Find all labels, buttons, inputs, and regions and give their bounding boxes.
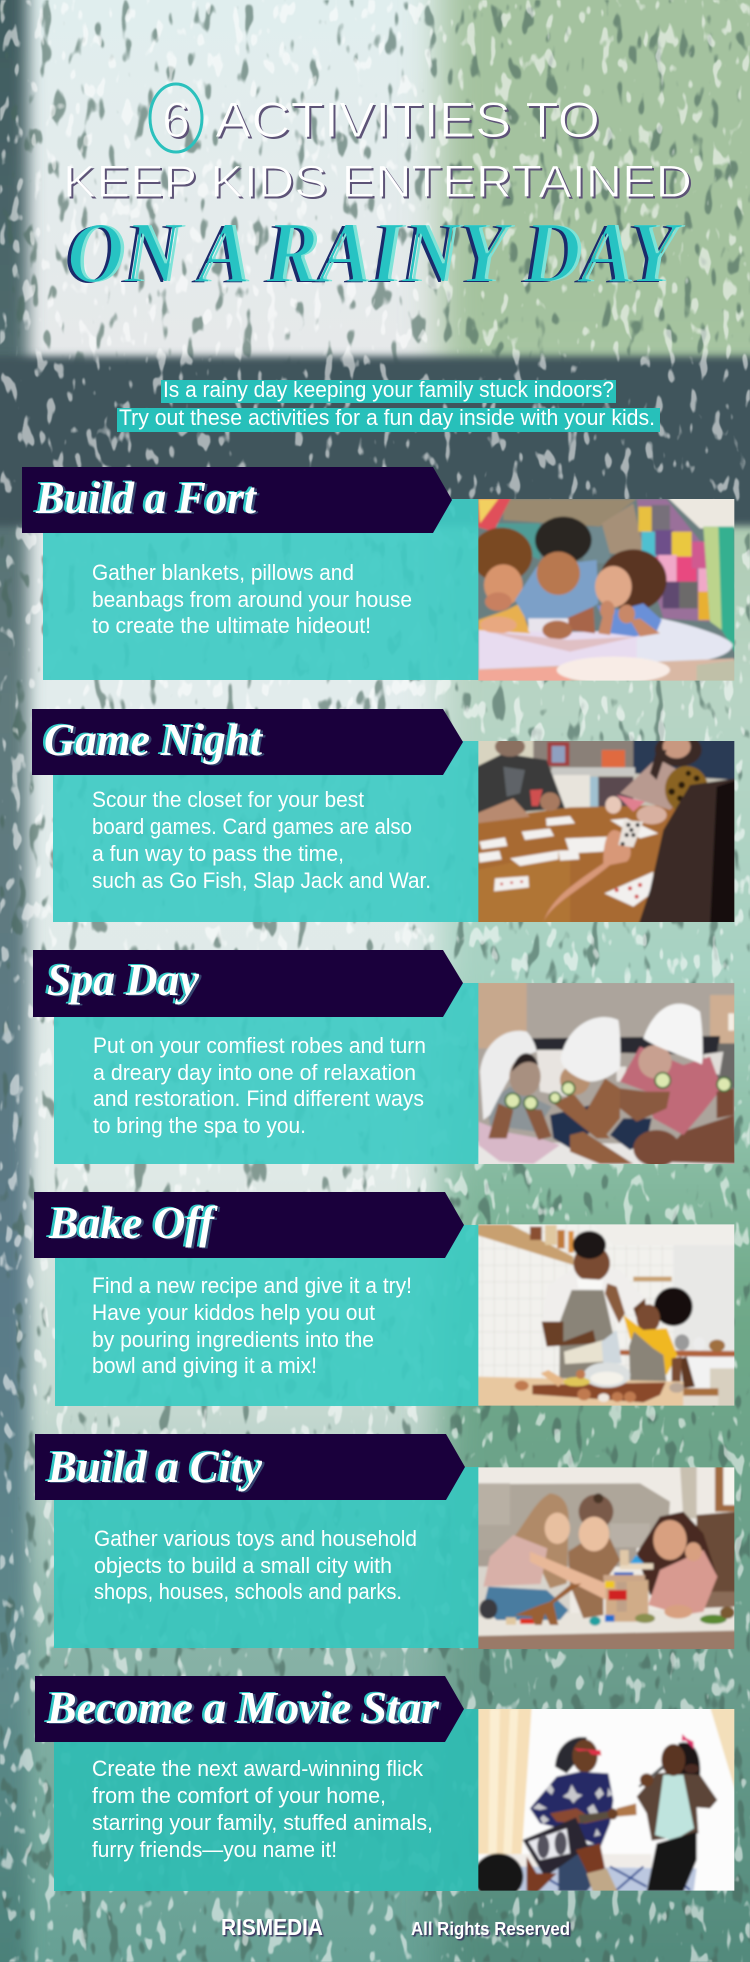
panel: Become a Movie Star [35,1676,737,1900]
description [92,1756,433,1862]
panel background [54,983,479,1164]
description: to create the ultimate hideout! [92,613,371,638]
panel: Bake Off [34,1192,737,1409]
banner: Build a City [35,1434,465,1500]
banner: Become a Movie Star: Become a Movie Star [46,1682,440,1733]
photo: kids building with blocks [477,1465,737,1652]
numeral 6 in circle: 6 [162,92,190,148]
banner: Game Night: Game Night [44,714,263,765]
title line 2: KEEP KIDS ENTERTAINED [63,156,692,207]
panel background [55,1225,479,1406]
title line 3: ON A RAINY DAY [67,205,683,302]
banner: Build a City: Build a City [47,1441,263,1492]
description: furry friends—you name it! [92,1837,337,1862]
panel background [54,1709,479,1891]
description [93,1033,426,1138]
description: Gather various toys and household [94,1526,417,1551]
intro text: Try out these activities for a fun day inside with your kids. [119,405,655,430]
description: Have your kiddos help you out [92,1300,375,1325]
intro text [117,377,660,432]
rights notice: All Rights Reserved [411,1919,570,1939]
photo: father and child baking [477,1222,737,1409]
description: bowl and giving it a mix! [92,1353,317,1378]
description: beanbags from around your house [92,587,412,612]
panel: Build a Fort [22,467,737,683]
panel: Game Night [32,709,737,925]
description: a fun way to pass the time, [92,841,344,866]
description: Create the next award-winning flick [92,1756,424,1781]
banner: Spa Day: Spa Day [47,954,200,1005]
banner: Build a Fort: Build a Fort [35,472,257,523]
banner: Bake Off: Bake Off [48,1197,218,1248]
description: and restoration. Find different ways [93,1086,424,1111]
description: from the comfort of your home, [92,1783,386,1808]
banner: Bake Off [34,1192,464,1258]
photo: family playing cards [477,733,737,925]
logo: RISMedia: RISMEDIA [221,1914,323,1940]
description: starring your family, stuffed animals, [92,1810,433,1835]
description: objects to build a small city with [94,1553,392,1578]
numeral 6 in circle [150,84,202,152]
panel background [43,499,479,680]
panel background [53,741,479,922]
intro text: Is a rainy day keeping your family stuck indoors? [163,377,614,402]
description: by pouring ingredients into the [92,1327,374,1352]
description: board games. Card games are also [92,814,412,839]
title [63,84,692,302]
title line 1: ACTIVITIES TO [215,92,600,148]
panel: Build a City [35,1434,737,1652]
banner: Spa Day [33,950,463,1017]
photo: kids performing with a ukulele [473,1707,737,1900]
photo: family reading in a blanket fort [471,497,737,683]
description: Find a new recipe and give it a try! [92,1273,412,1298]
description: shops, houses, schools and parks. [94,1579,402,1604]
description [92,1273,412,1378]
description: Gather blankets, pillows and [92,560,354,585]
description: Scour the closet for your best [92,787,364,812]
description: Put on your comfiest robes and turn [93,1033,426,1058]
description [92,560,412,638]
photo: spa day with towels and cucumbers [477,982,737,1168]
description: such as Go Fish, Slap Jack and War. [92,868,431,893]
footer [221,1914,570,1940]
description [92,787,431,893]
banner: Build a Fort [22,467,452,533]
panel: Spa Day [33,950,737,1168]
banner: Game Night [32,709,463,775]
description [94,1526,417,1604]
panel background [54,1467,479,1648]
description: a dreary day into one of relaxation [93,1060,416,1085]
description: to bring the spa to you. [93,1113,306,1138]
